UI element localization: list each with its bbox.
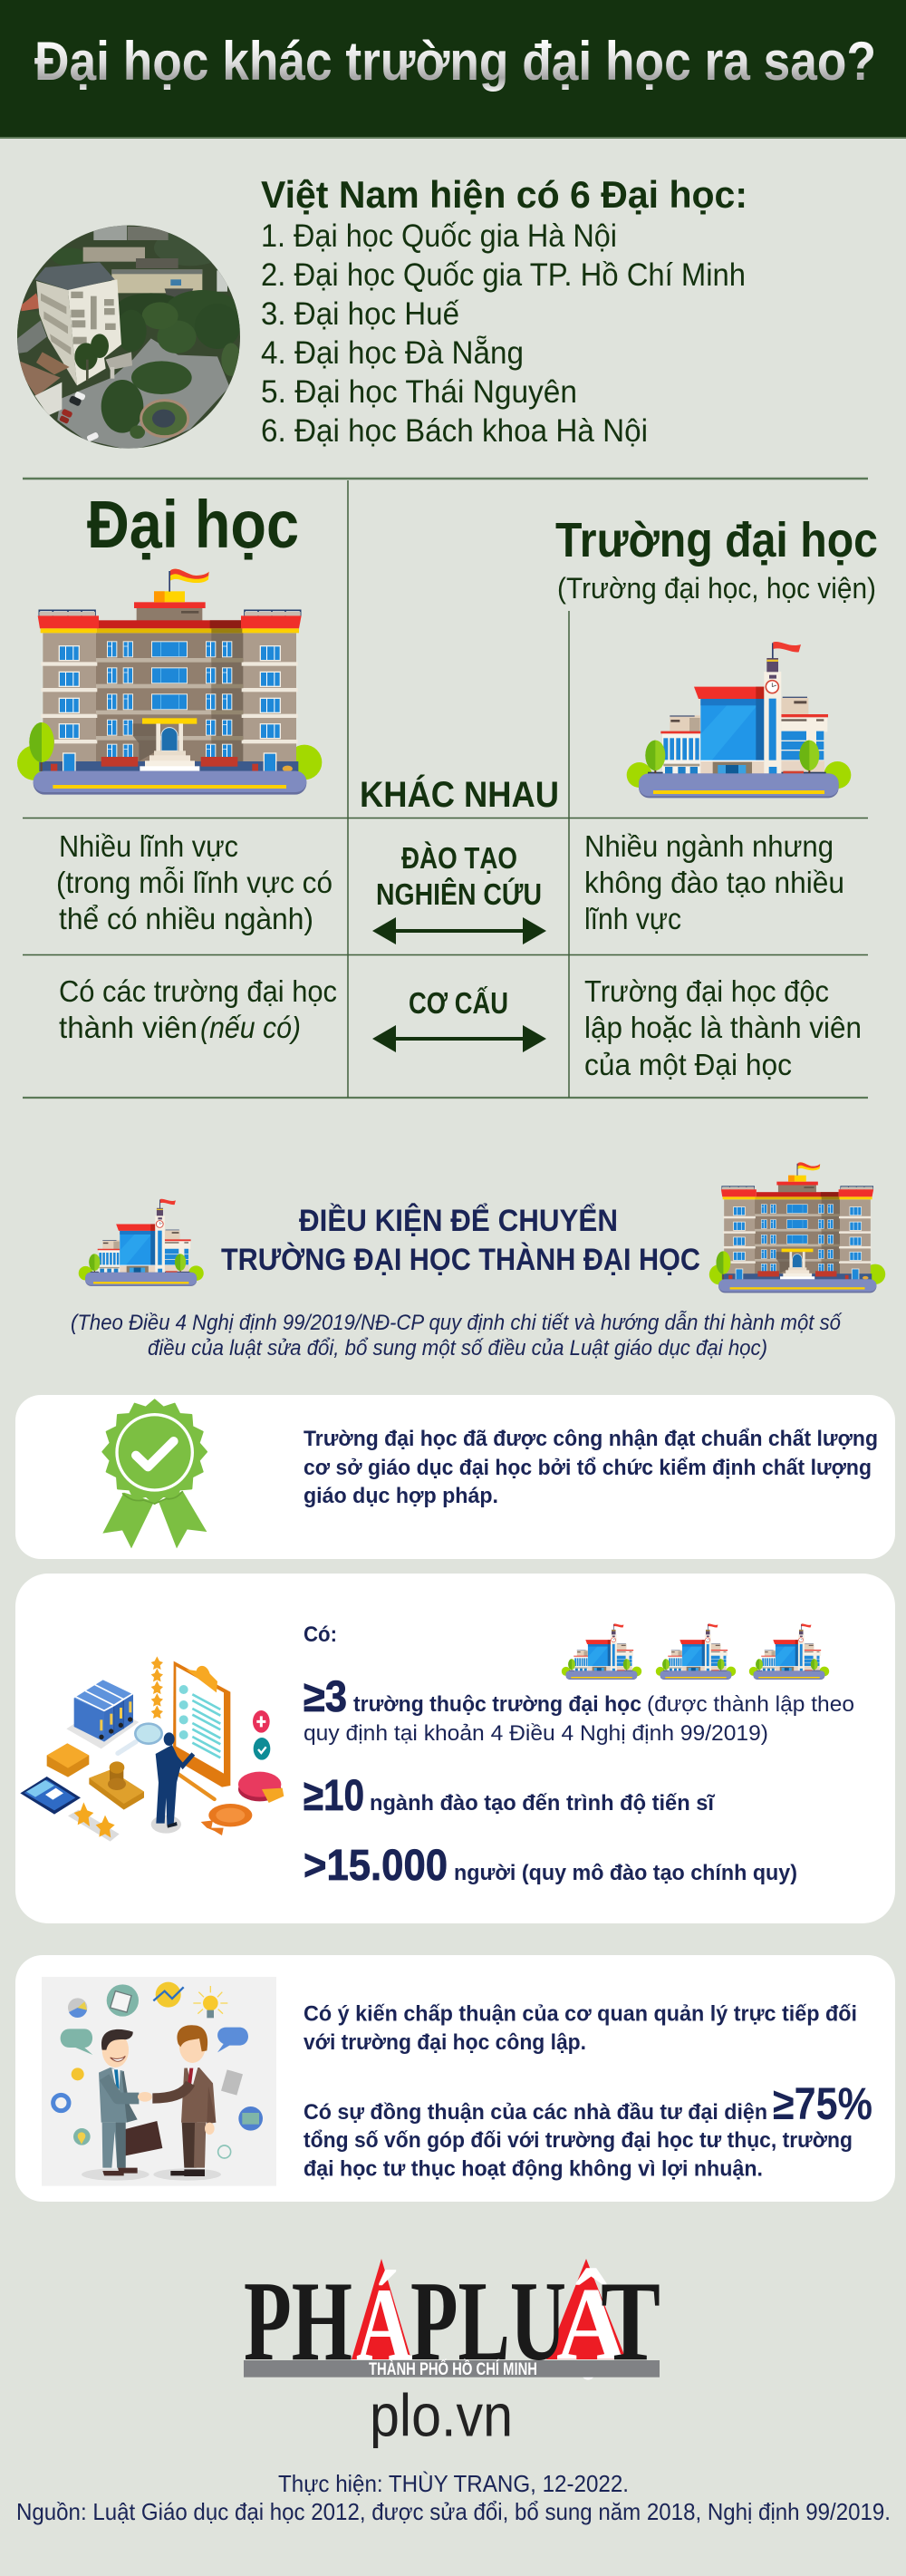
logo: Pháp Luật: Ậ <box>556 2267 626 2383</box>
list items: 6. Đại học Bách khoa Hà Nội <box>261 413 648 449</box>
list items: 2. Đại học Quốc gia TP. Hồ Chí Minh <box>261 257 746 293</box>
illustration: two businessmen shaking hands <box>42 1977 276 2186</box>
list items: 5. Đại học Thái Nguyên <box>261 374 577 410</box>
stat: at least 10 doctoral majors: ngành đào tạo đến trình độ tiến sĩ <box>370 1791 715 1816</box>
row 1 left text <box>56 829 333 935</box>
condition 1 text: Trường đại học đã được công nhận đạt chuẩn chất lượng <box>304 1427 878 1451</box>
legal reference note <box>71 1310 843 1361</box>
row 2 left text: thành viên <box>59 1011 198 1044</box>
column heading: Trường đại học <box>555 513 878 605</box>
stat: at least 3 schools: ≥3 <box>304 1673 347 1721</box>
row 2 right text: Trường đại học độc <box>584 974 829 1008</box>
row 2 right text <box>584 974 862 1081</box>
condition 3 text: public universities <box>304 2001 857 2055</box>
icon: large university building in section heading <box>709 1162 885 1293</box>
row 1 left text: (trong mỗi lĩnh vực có <box>56 866 333 899</box>
row 1 left text: Nhiều lĩnh vực <box>59 829 238 863</box>
row 1 right text: lĩnh vực <box>584 902 681 935</box>
row 1 right text <box>584 829 844 935</box>
arrow: double headed, row 2 <box>372 1025 546 1052</box>
icon: small college building <box>627 642 851 798</box>
condition 3 text: private universities <box>304 2078 872 2181</box>
list items: 3. Đại học Huế <box>261 296 459 332</box>
list items: 1. Đại học Quốc gia Hà Nội <box>261 218 617 254</box>
icon: green rosette with check mark <box>102 1399 207 1548</box>
stat: at least 3 schools: quy định tại khoản 4 Điều 4 Nghị định 99/2019) <box>304 1721 768 1746</box>
row 1 right text: Nhiều ngành nhưng <box>584 829 834 863</box>
section heading: conditions: TRƯỜNG ĐẠI HỌC THÀNH ĐẠI HỌC <box>221 1243 700 1277</box>
panel: condition 3 approval <box>15 1955 895 2202</box>
list items: 4. Đại học Đà Nẵng <box>261 335 524 371</box>
list heading: Việt Nam hiện có 6 Đại học: <box>261 173 747 216</box>
logo: Pháp Luật: Á <box>356 2267 412 2383</box>
condition 3 text: public universities: Có ý kiến chấp thuận của cơ quan quản lý trực tiếp đối <box>304 2001 857 2027</box>
row 1 left text: thể có nhiều ngành) <box>59 902 313 935</box>
condition 1 text: cơ sở giáo dục đại học bởi tổ chức kiểm định chất lượng <box>304 1456 872 1480</box>
panel: condition 1 accreditation <box>15 1395 895 1559</box>
logo: Pháp Luật <box>244 2259 660 2385</box>
condition 3 text: private universities: tổng số vốn góp đối với trường đại học tư thục, trường <box>304 2128 853 2153</box>
row 2 criterion label: CƠ CẤU <box>409 986 508 1020</box>
stat: over 15000 students: >15.000 <box>304 1842 448 1890</box>
section heading: conditions <box>221 1204 700 1277</box>
row 1 right text: không đào tạo nhiều <box>584 866 844 899</box>
logo: Pháp Luật: PH <box>244 2259 352 2385</box>
legal reference note: điều của luật sửa đổi, bổ sung một số điều của Luật giáo dục đại học) <box>148 1336 767 1361</box>
photo: university campus, aerial view <box>15 224 245 453</box>
logo: Pháp Luật: T <box>601 2259 660 2385</box>
row 2 left text <box>59 974 337 1044</box>
panel: condition 2 scale <box>15 1574 895 1923</box>
list panel: Việt Nam hiện có 6 Đại học <box>261 173 747 449</box>
icon: small college building in section heading <box>79 1199 204 1286</box>
logo: Pháp Luật: THÀNH PHỐ HỒ CHÍ MINH <box>369 2359 537 2379</box>
condition 2 text: Có: Có: <box>304 1622 337 1647</box>
column heading: Đại học: Đại học <box>87 487 299 562</box>
row 2 left text: Có các trường đại học <box>59 974 337 1008</box>
comparison table <box>17 479 878 1098</box>
row 1 criterion label <box>376 841 542 911</box>
row 2 left text: (nếu có) <box>200 1011 301 1044</box>
row 2 right text: của một Đại học <box>584 1048 792 1081</box>
row 1 criterion label: NGHIÊN CỨU <box>376 877 542 911</box>
stat: at least 10 doctoral majors <box>304 1772 715 1820</box>
list items <box>261 218 746 449</box>
column heading: Trường đại học: (Trường đại học, học viện) <box>557 572 876 605</box>
stat: at least 3 schools <box>304 1673 854 1746</box>
icon: large university building <box>17 569 322 795</box>
stat: at least 3 schools: (được thành lập theo <box>647 1692 854 1717</box>
condition 1 text <box>304 1427 878 1508</box>
label: Khác nhau: KHÁC NHAU <box>360 774 559 815</box>
column heading: Trường đại học: Trường đại học <box>555 513 878 567</box>
section heading: conditions: ĐIỀU KIỆN ĐỂ CHUYỂN <box>299 1204 618 1238</box>
condition 3 text: private universities: Có sự đồng thuận của các nhà đầu tư đại diện <box>304 2100 767 2125</box>
credits and source <box>16 2470 891 2525</box>
icons: three college buildings <box>562 1623 829 1680</box>
credits and source: Thực hiện: THÙY TRANG, 12-2022. <box>278 2470 629 2497</box>
condition 3 text: private universities: ≥75% <box>773 2078 872 2129</box>
row 2 right text: lập hoặc là thành viên <box>584 1011 862 1044</box>
row 1 criterion label: ĐÀO TẠO <box>401 841 517 875</box>
legal reference note: (Theo Điều 4 Nghị định 99/2019/NĐ-CP quy định chi tiết và hướng dẫn thi hành một số <box>71 1310 843 1335</box>
condition 3 text: private universities: đại học tư thục hoạt động không vì lợi nhuận. <box>304 2157 763 2181</box>
stat: over 15000 students: người (quy mô đào tạo chính quy) <box>454 1861 797 1885</box>
condition 1 text: giáo dục hợp pháp. <box>304 1484 498 1508</box>
stat: at least 3 schools: trường thuộc trường đại học <box>353 1692 641 1717</box>
illustration: man checking a clipboard with office items <box>20 1656 284 1842</box>
header band with title <box>0 0 906 139</box>
condition 3 text: public universities: với trường đại học công lập. <box>304 2030 586 2055</box>
website: plo.vn <box>370 2382 513 2449</box>
logo: Pháp Luật: PLU <box>410 2259 566 2385</box>
stat: over 15000 students <box>304 1842 797 1890</box>
arrow: double headed, row 1 <box>372 917 546 944</box>
stat: at least 10 doctoral majors: ≥10 <box>304 1772 364 1820</box>
